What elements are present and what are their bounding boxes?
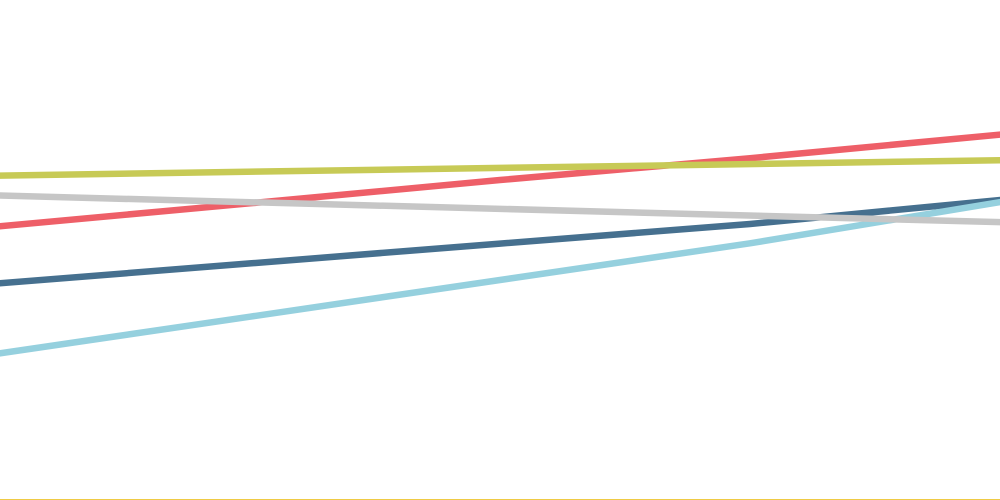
line: light blue series — [0, 202, 1000, 354]
series lines — [0, 134, 1000, 354]
line: gray series — [0, 196, 1000, 222]
line: red series — [0, 134, 1000, 226]
bottom axis line — [0, 499, 1000, 500]
line: yellow-green series — [0, 160, 1000, 176]
line: dark blue series — [0, 200, 1000, 283]
